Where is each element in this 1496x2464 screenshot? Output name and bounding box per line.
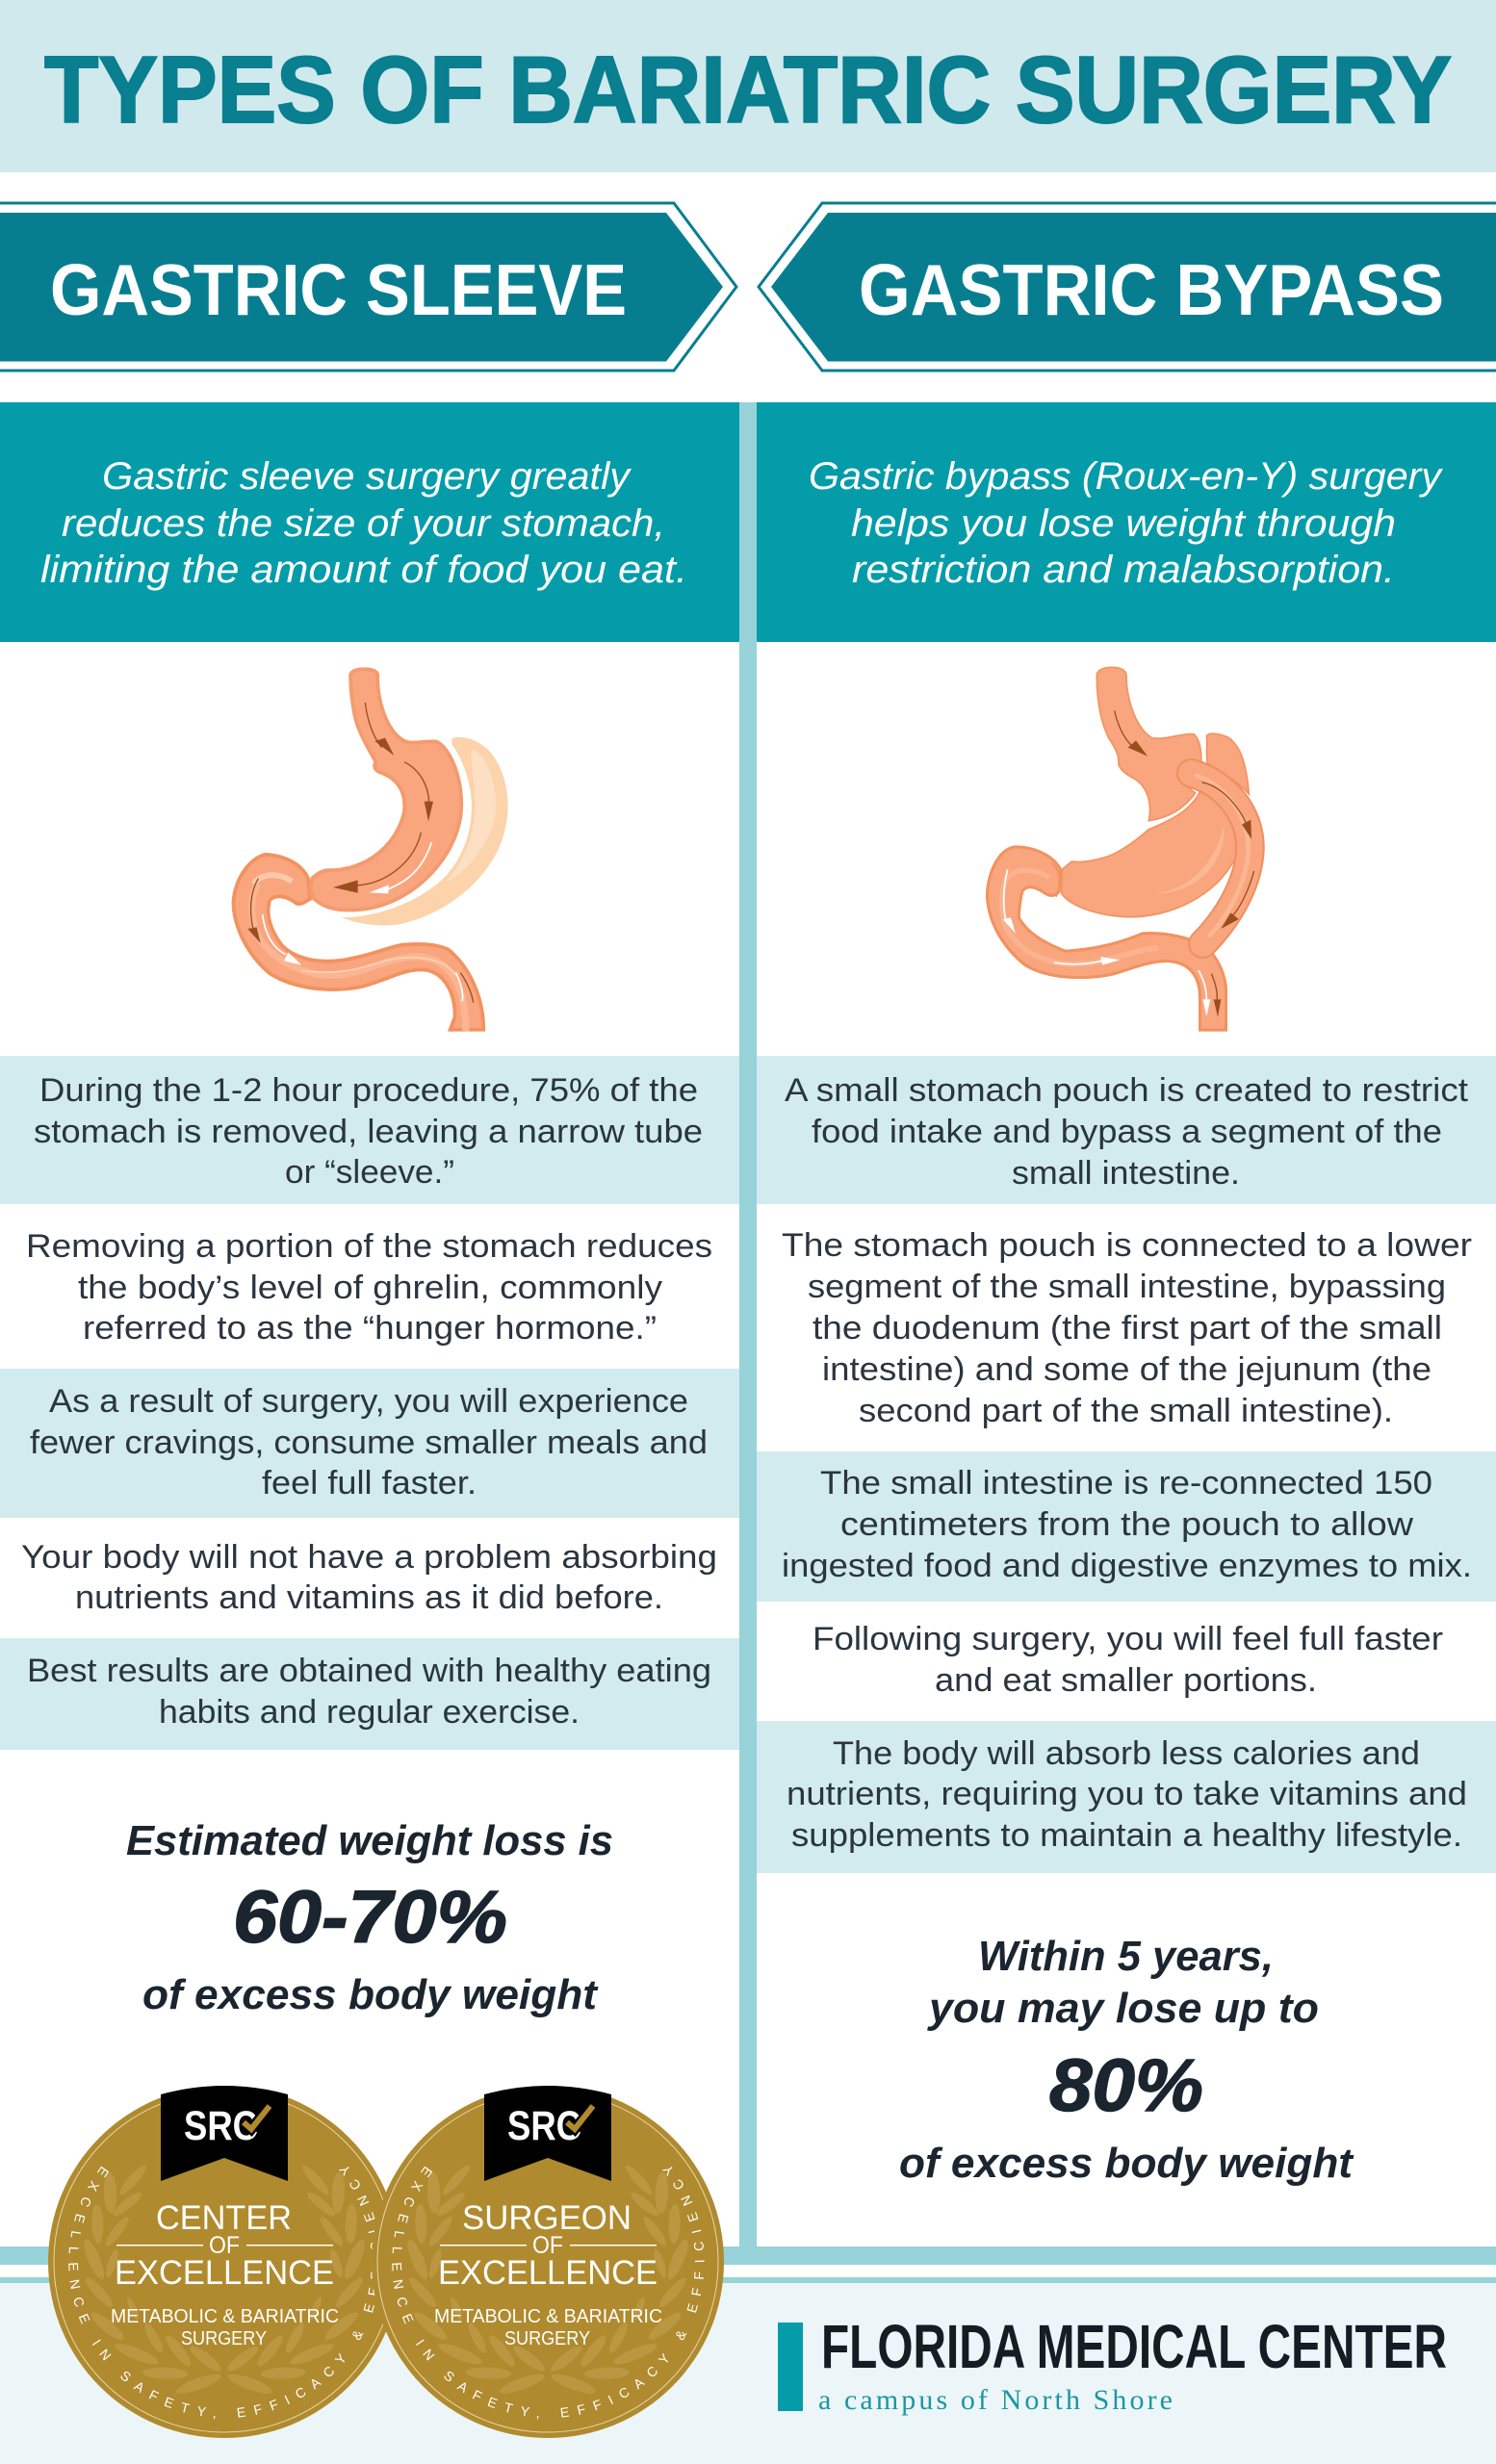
- arrow banner: gastric bypass: GASTRIC BYPASS: [859, 249, 1444, 330]
- row 4: Your body will not have a problem absorbing: [21, 1539, 717, 1576]
- row 1: [757, 1056, 1496, 1204]
- callout: bypass weight loss: of excess body weight: [899, 2140, 1354, 2187]
- row 3: The small intestine is re-connected 150: [820, 1465, 1432, 1502]
- column divider: [739, 402, 757, 2250]
- small intestine: [232, 853, 485, 1032]
- row 5: Best results are obtained with healthy eating: [27, 1653, 711, 1689]
- row 3: As a result of surgery, you will experience: [49, 1383, 688, 1420]
- panel: gastric sleeve intro: limiting the amount of food you eat.: [40, 549, 687, 591]
- row 1: [0, 1056, 739, 1204]
- badge title: EXCELLENCE: [438, 2254, 658, 2292]
- row 4: [812, 1621, 1443, 1699]
- row 2: the duodenum (the first part of the small: [812, 1310, 1442, 1347]
- row 1: stomach is removed, leaving a narrow tube: [34, 1114, 703, 1150]
- arrow banner: gastric sleeve: [0, 203, 736, 371]
- panel: gastric bypass details: [757, 1056, 1496, 1873]
- illustration: bypass stomach: [986, 667, 1254, 1032]
- row 3: [0, 1369, 739, 1518]
- badge title: [434, 2199, 662, 2349]
- title: TYPES OF BARIATRIC SURGERY: [44, 37, 1452, 142]
- row 2: segment of the small intestine, bypassing: [808, 1269, 1446, 1305]
- row 4: nutrients and vitamins as it did before.: [75, 1579, 663, 1616]
- ribbon with SRC logo: [484, 2086, 611, 2181]
- row 5: habits and regular exercise.: [159, 1694, 580, 1731]
- panel: gastric sleeve intro: Gastric sleeve surgery greatly: [102, 455, 632, 498]
- callout: sleeve weight loss: of excess body weight: [142, 1971, 599, 2018]
- row 5: supplements to maintain a healthy lifestyle.: [791, 1817, 1462, 1854]
- row 3: fewer cravings, consume smaller meals and: [30, 1424, 708, 1461]
- row 3: centimeters from the pouch to allow: [840, 1506, 1413, 1543]
- ribbon with SRC logo: SRC: [507, 2103, 581, 2149]
- row 2: The stomach pouch is connected to a lower: [782, 1227, 1472, 1264]
- callout: bypass weight loss: Within 5 years,: [978, 1933, 1274, 1980]
- row 2: [26, 1228, 712, 1347]
- badge: center of excellence: [48, 2086, 386, 2438]
- badge title: METABOLIC & BARIATRIC: [111, 2305, 339, 2327]
- badge title: SURGEON: [462, 2199, 632, 2237]
- panel: gastric sleeve intro: [0, 402, 739, 642]
- row 4: Following surgery, you will feel full faster: [812, 1621, 1443, 1657]
- row 2: intestine) and some of the jejunum (the: [822, 1351, 1432, 1388]
- small intestine: [986, 845, 1227, 1032]
- row 2: the body’s level of ghrelin, commonly: [78, 1270, 662, 1306]
- logo: Florida Medical Center: a campus of North Shore: [818, 2384, 1173, 2416]
- callout: bypass weight loss: you may lose up to: [927, 1985, 1319, 2032]
- badge: surgeon of excellence: [372, 2086, 724, 2438]
- callout: sleeve weight loss: Estimated weight loss is: [126, 1817, 613, 1864]
- lower stomach: [1062, 791, 1239, 917]
- row 5: nutrients, requiring you to take vitamins and: [787, 1776, 1467, 1812]
- ribbon with SRC logo: [161, 2086, 288, 2181]
- row 4: [21, 1539, 717, 1616]
- bypass limb: [1191, 773, 1250, 944]
- removed stomach portion: [342, 737, 508, 925]
- row 3: [757, 1451, 1496, 1602]
- row 5: [0, 1638, 739, 1750]
- stomach highlight: [1152, 825, 1225, 893]
- badge title: OF: [209, 2232, 240, 2259]
- row 1: A small stomach pouch is created to restrict: [785, 1072, 1469, 1109]
- row 2: [782, 1227, 1472, 1429]
- row 3: feel full faster.: [262, 1465, 477, 1502]
- row 3: ingested food and digestive enzymes to mix.: [782, 1548, 1472, 1584]
- badge title: METABOLIC & BARIATRIC: [434, 2305, 662, 2327]
- row 4: and eat smaller portions.: [935, 1662, 1317, 1699]
- panel: gastric bypass intro: restriction and malabsorption.: [852, 549, 1395, 591]
- row 2: Removing a portion of the stomach reduces: [26, 1228, 712, 1265]
- callout: sleeve weight loss: 60-70%: [233, 1876, 507, 1959]
- stomach remnant: [1206, 733, 1249, 794]
- panel: gastric bypass intro: Gastric bypass (Roux-en-Y) surgery: [809, 455, 1444, 498]
- arrow banner: gastric bypass: [759, 203, 1496, 371]
- row 5: [757, 1721, 1496, 1873]
- badge title: OF: [532, 2232, 563, 2259]
- circular motto: EXCELLENCE IN SAFETY, EFFICACY & EFFICIENCY: [392, 2166, 705, 2420]
- panel: gastric bypass intro: [757, 402, 1496, 642]
- food flow arrows: [1003, 710, 1254, 1017]
- row 1: small intestine.: [1012, 1155, 1240, 1192]
- logo: Florida Medical Center: [778, 2312, 1447, 2416]
- circular motto: EXCELLENCE IN SAFETY, EFFICACY & EFFICIENCY: [68, 2166, 375, 2420]
- arrow banner: gastric sleeve: GASTRIC SLEEVE: [50, 249, 627, 330]
- illustration: sleeve stomach: [232, 667, 508, 1032]
- panel: gastric sleeve details: [0, 1056, 739, 1750]
- callout: bypass weight loss: [899, 1933, 1354, 2187]
- ribbon with SRC logo: SRC: [184, 2103, 258, 2149]
- badge title: SURGERY: [181, 2327, 267, 2349]
- row 2: second part of the small intestine).: [859, 1393, 1393, 1429]
- row 5: The body will absorb less calories and: [833, 1735, 1420, 1772]
- footer background: [0, 2246, 1496, 2464]
- badge title: EXCELLENCE: [115, 2254, 334, 2292]
- callout: bypass weight loss: 80%: [1049, 2044, 1203, 2127]
- stomach body: [309, 667, 463, 911]
- row 1: or “sleeve.”: [285, 1154, 454, 1191]
- panel: gastric bypass intro: helps you lose weight through: [851, 502, 1396, 545]
- badge title: CENTER: [156, 2199, 292, 2237]
- panel: gastric sleeve intro: reduces the size of your stomach,: [62, 502, 665, 545]
- food flow arrows: [247, 703, 474, 1003]
- badge title: SURGERY: [504, 2327, 590, 2349]
- callout: sleeve weight loss: [126, 1817, 613, 2018]
- row 1: During the 1-2 hour procedure, 75% of the: [39, 1072, 698, 1109]
- upper pouch and esophagus: [1096, 667, 1201, 821]
- title banner: [0, 0, 1496, 172]
- row 1: food intake and bypass a segment of the: [812, 1114, 1442, 1150]
- badge title: [111, 2199, 339, 2349]
- row 2: referred to as the “hunger hormone.”: [83, 1310, 657, 1347]
